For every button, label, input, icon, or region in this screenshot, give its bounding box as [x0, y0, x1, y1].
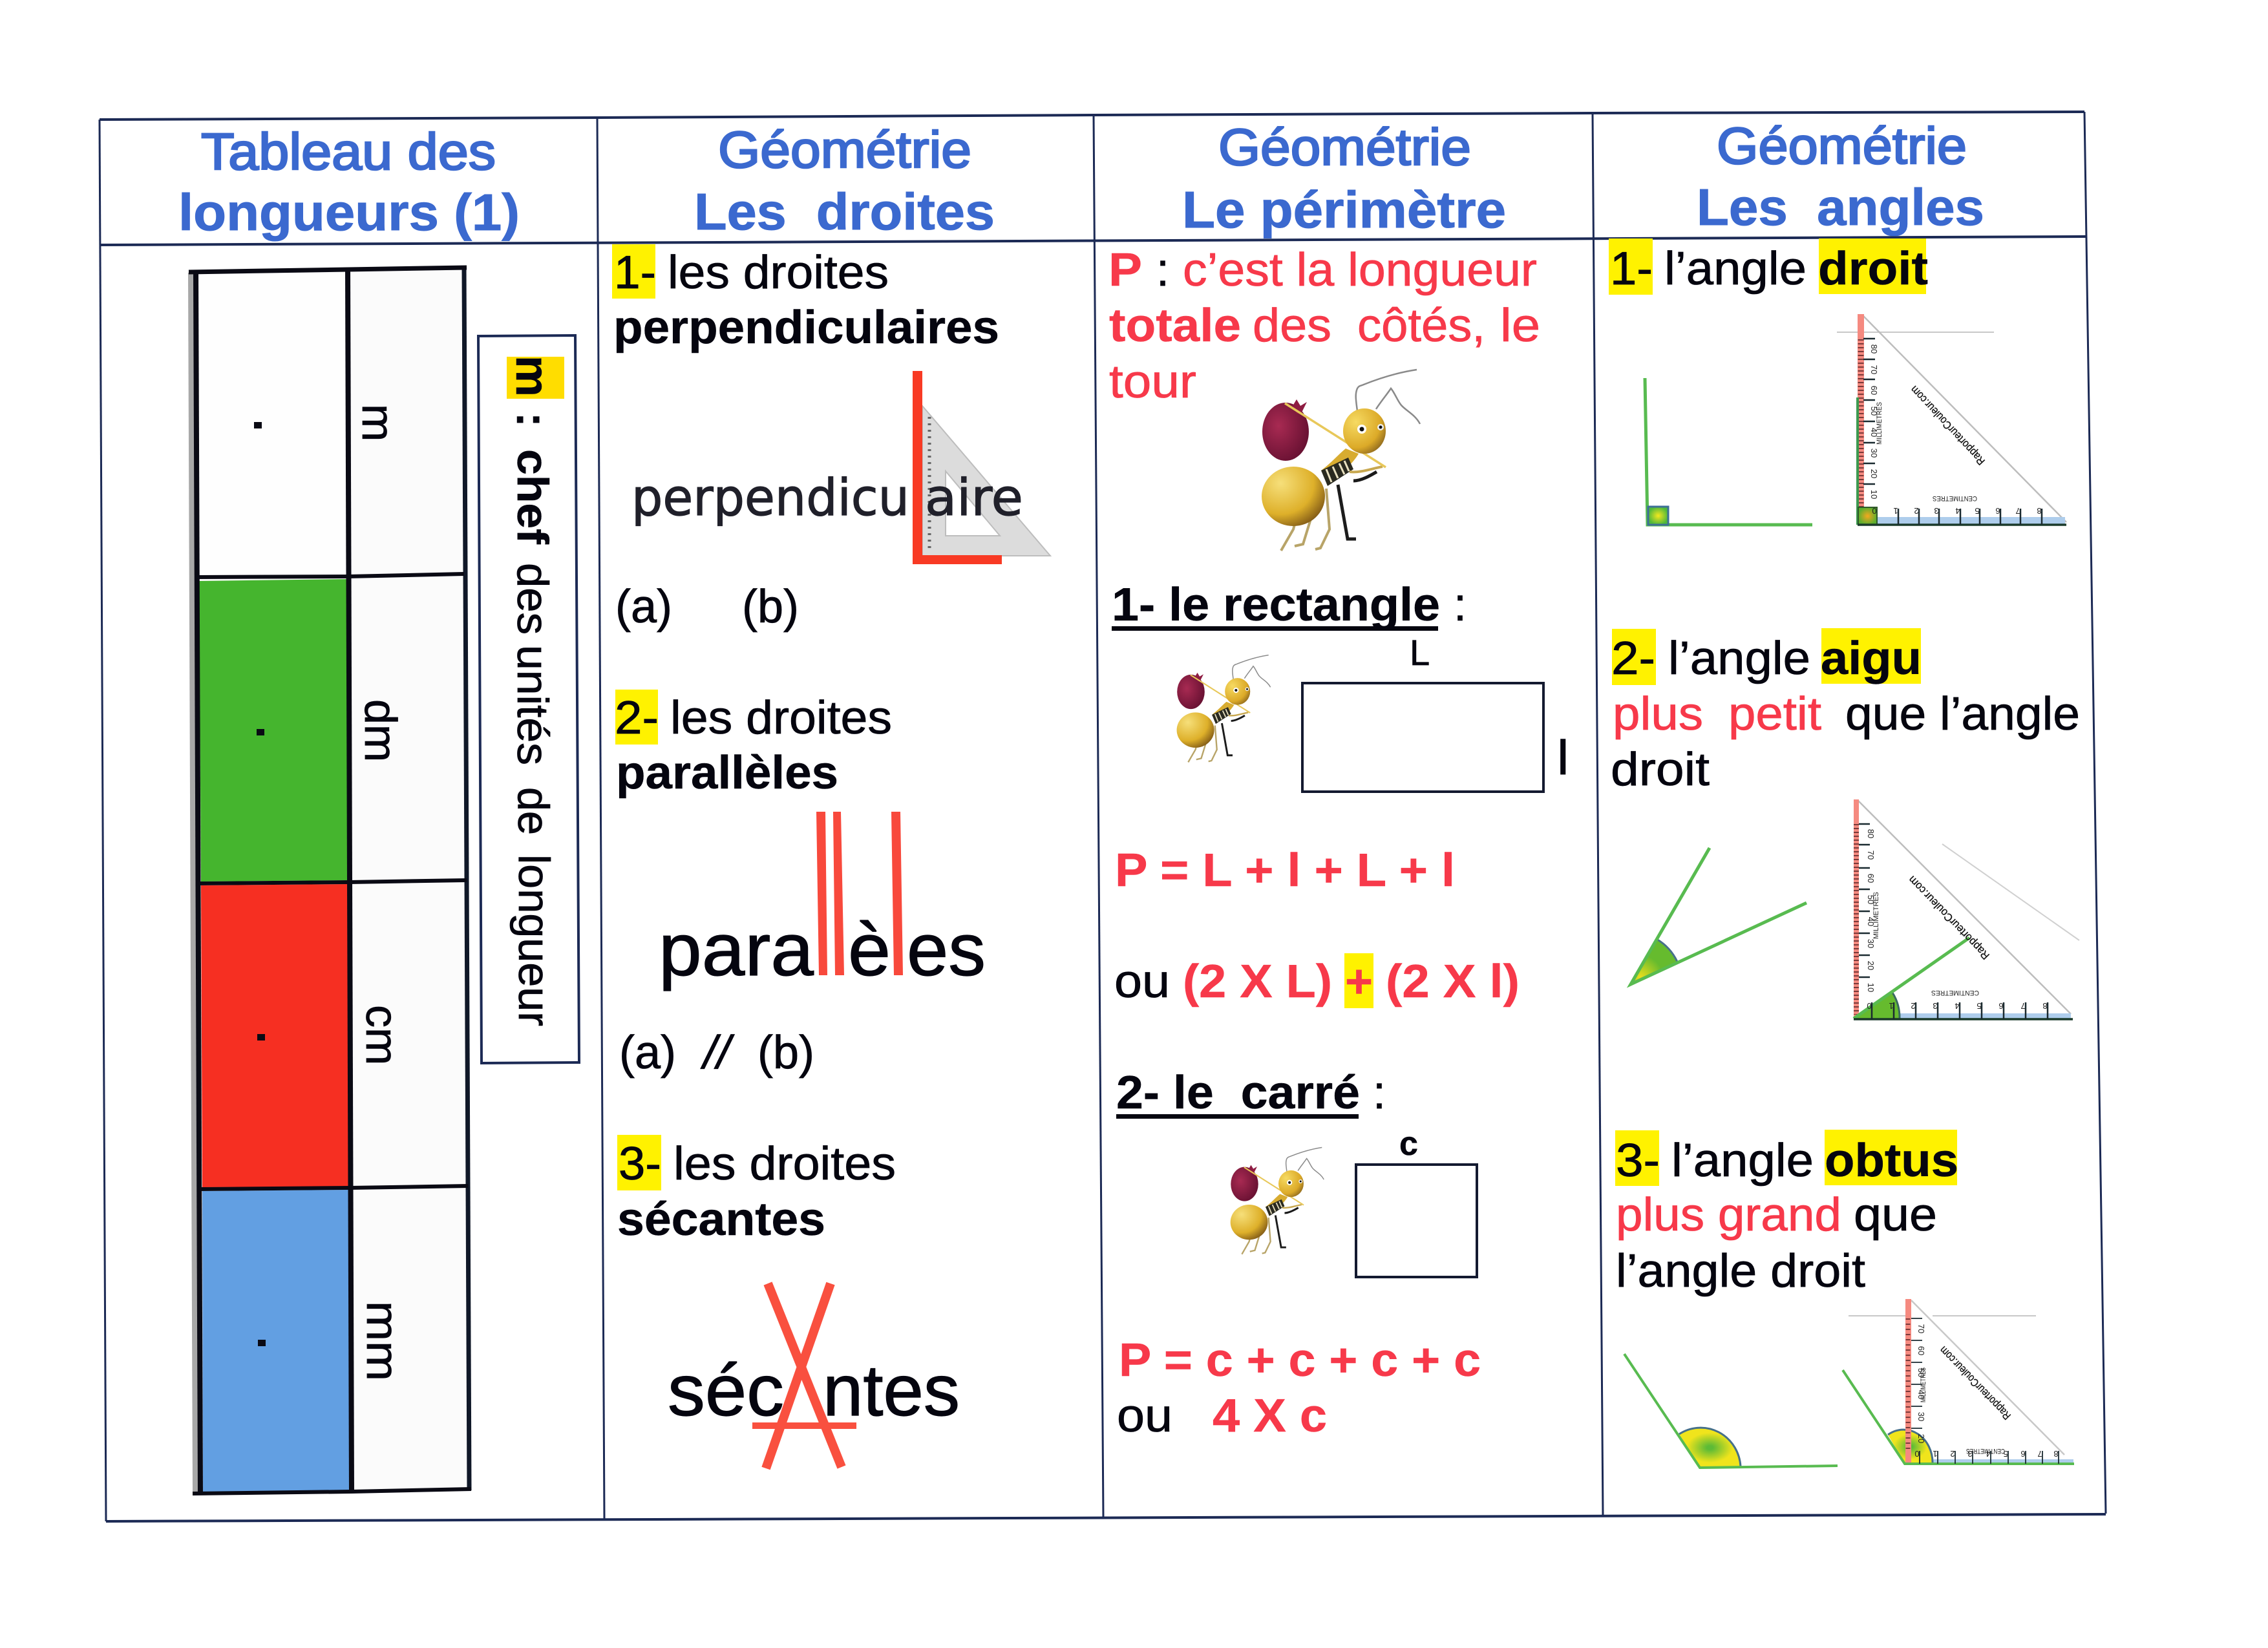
heading: 1- le rectangle: 1- le rectangle: [1112, 579, 1440, 631]
callout: m chef des unites de longueur: unités: [508, 645, 557, 765]
diagram: set square on acute angle: RapporteurCouleur.com: [1906, 873, 1992, 962]
formula: rectangle perimeter: ou: [1114, 956, 1170, 1008]
diagram: set square on right angle: 0: [1872, 506, 1877, 516]
heading: Le périmètre: Le périmètre: [1182, 181, 1506, 238]
callout: m chef des unites de longueur: des: [508, 563, 557, 635]
diagram: set square on acute angle: 70: [1866, 850, 1876, 860]
diagram: set square on acute angle: 30: [1866, 939, 1876, 948]
diagram: set square on right angle: 50: [1869, 407, 1879, 416]
units table: [188, 266, 471, 1494]
item 2: angle aigu: que l’angle: [1845, 688, 2080, 740]
heading: Les droites: Géométrie: [718, 121, 971, 178]
item 3: sécantes: [617, 1135, 896, 1245]
diagram: set square on acute angle: 8: [2042, 1001, 2048, 1011]
item 3: sécantes: les droites: [673, 1138, 896, 1190]
diagram: set square on acute angle: 60: [1866, 874, 1876, 883]
heading: Les angles: [1697, 117, 1984, 236]
decimal point mm: [258, 1340, 266, 1346]
diagram: set square on acute angle: 3: [1933, 1001, 1938, 1011]
diagram: set square on obtuse angle: 40: [1916, 1390, 1926, 1399]
item 2: parallèles: 2-: [615, 692, 659, 744]
decimal point cm: [257, 1034, 265, 1041]
diagram: set square on obtuse angle: 1: [1933, 1449, 1938, 1459]
callout: m chef des unites de longueur: :: [507, 412, 556, 427]
diagram: set square on acute angle: MILLIMETRES: [1872, 892, 1880, 939]
diagram: set square on obtuse angle: 2: [1950, 1449, 1955, 1459]
diagram: set square on obtuse angle: 8: [2053, 1449, 2059, 1459]
diagram: set square on acute angle: 10: [1866, 983, 1876, 992]
callout: m chef des unites de longueur: chef: [508, 449, 557, 544]
rectangle diagram with L and l: l: [1558, 731, 1568, 785]
diagram: set square on obtuse angle: 6: [2020, 1449, 2026, 1459]
cell: cm red: [201, 884, 350, 1187]
diagram: set square on obtuse angle: 70: [1916, 1324, 1926, 1333]
illustration: parallèles: es: [907, 909, 986, 991]
diagram: set square on obtuse angle: 20: [1916, 1434, 1926, 1443]
illustration: parallèles: [659, 812, 986, 991]
diagram: set square on right angle: 6: [1995, 506, 2000, 516]
callout: m chef des unites de longueur: de: [509, 787, 558, 835]
cell: mm blue: [202, 1190, 351, 1492]
diagram: set square on right angle: 8: [2037, 506, 2042, 516]
rectangle diagram with L and l: L: [1410, 632, 1430, 673]
diagram: set square on acute angle: 2: [1911, 1001, 1916, 1011]
labels (a) (b): (b): [742, 581, 799, 633]
item 2: angle aigu: 2-: [1611, 633, 1655, 684]
rectangle diagram with L and l: [1302, 632, 1568, 792]
item 2: parallèles: parallèles: [616, 747, 838, 799]
definition text: P: [1108, 244, 1142, 296]
heading: Les droites: [694, 121, 995, 240]
item 3: angle obtus: plus grand: [1616, 1189, 1841, 1241]
definition text: des: [1253, 300, 1331, 352]
formula: rectangle perimeter: +: [1345, 956, 1373, 1008]
heading: Les angles: Les angles: [1697, 178, 1984, 236]
diagram: set square on obtuse angle: 60: [1916, 1346, 1926, 1355]
illustration: sécantes: ntes: [823, 1350, 960, 1431]
callout: m chef des unites de longueur: m: [506, 355, 558, 397]
illustration: parallèles: è: [848, 909, 891, 991]
panel: Géométrie Les droites: [612, 121, 1050, 1468]
item 2: angle aigu: plus: [1613, 688, 1703, 740]
formula: rectangle perimeter: P = L + l + L + l: [1115, 845, 1455, 896]
diagram: set square on acute angle: 5: [1977, 1001, 1982, 1011]
item 2: parallèles: les droites: [670, 692, 892, 744]
diagram: set square on acute angle: 1: [1889, 1001, 1894, 1011]
diagram: set square on right angle: CENTIMETRES: [1933, 494, 1977, 502]
callout: m chef des unites de longueur: [478, 335, 579, 1063]
diagram: set square on obtuse angle: [1843, 1299, 2074, 1464]
decimal point dm: [257, 729, 264, 735]
panel: Géométrie Le périmètre: [1108, 118, 1568, 1442]
diagram: set square on right angle: 60: [1869, 386, 1879, 395]
heading: 2- le carré: 2- le carré: [1116, 1067, 1360, 1119]
decimal point m: [254, 422, 262, 428]
formula: square perimeter: [1117, 1335, 1481, 1442]
square diagram with c: [1356, 1125, 1477, 1277]
icon: small ant (square): [1231, 1147, 1324, 1254]
diagram: set square on obtuse angle: CENTIMETRES: [1966, 1447, 2005, 1455]
diagram: obtuse angle: [1624, 1354, 1838, 1468]
illustration: sécantes: séc: [668, 1350, 784, 1431]
item 1: angle droit: 1-: [1610, 243, 1653, 295]
item 1: angle droit: droit: [1818, 243, 1928, 295]
heading: Tableau des longueurs: [178, 123, 520, 241]
item 3: angle obtus: l’angle droit: [1616, 1245, 1865, 1297]
formula: square perimeter: 4 X c: [1213, 1390, 1327, 1442]
cell: m: [198, 273, 348, 577]
table grid: [100, 112, 2106, 1521]
diagram: set square on right angle: 7: [2015, 506, 2020, 516]
labels (a) (b): (a): [615, 581, 672, 633]
item 1: perpendiculaires: 1-: [614, 247, 656, 299]
heading: Les angles: Géométrie: [1717, 117, 1967, 174]
diagram: set square on right angle: 1: [1893, 506, 1898, 516]
heading: Les droites: Les droites: [694, 183, 995, 240]
diagram: set square on right angle: 20: [1869, 469, 1879, 478]
formula: rectangle perimeter: (2 X l): [1386, 956, 1520, 1008]
item 2: angle aigu: droit: [1611, 744, 1710, 796]
diagram: set square on right angle: 80: [1869, 344, 1879, 354]
diagram: set square on obtuse angle: 7: [2037, 1449, 2042, 1459]
unit: mm: mm: [357, 1301, 408, 1381]
illustration: perpendiculaire with set square: perpendicu: [631, 469, 909, 527]
icon: small ant (rectangle): [1177, 655, 1271, 762]
heading: 1- le rectangle: :: [1454, 579, 1467, 631]
diagram: set square on right angle: RapporteurCouleur.com: [1908, 383, 1987, 467]
unit: dm: dm: [355, 699, 406, 762]
diagram: set square on right angle: 70: [1869, 365, 1879, 374]
heading: 2- le carré: :: [1373, 1067, 1386, 1119]
illustration: sécantes: [668, 1284, 960, 1468]
item 1: perpendiculaires: [612, 244, 999, 354]
definition text: [1108, 244, 1540, 408]
item 2: angle aigu: aigu: [1821, 633, 1922, 684]
cell: dm green: [199, 579, 349, 882]
formula: square perimeter: ou: [1117, 1390, 1172, 1442]
diagram: set square on right angle: 40: [1869, 428, 1879, 437]
item 3: angle obtus: obtus: [1825, 1135, 1958, 1187]
item 1: perpendiculaires: les droites: [668, 247, 889, 299]
definition text: c’est la longueur: [1183, 244, 1537, 296]
diagram: set square on acute angle: 40: [1866, 917, 1876, 926]
diagram: right angle: [1645, 378, 1812, 525]
item 2: parallèles: [615, 690, 892, 799]
diagram: set square on right angle: 10: [1869, 490, 1879, 499]
labels (a) // (b): (b): [758, 1027, 814, 1079]
diagram: set square on obtuse angle: RapporteurCouleur.com: [1937, 1344, 2013, 1422]
icon: ant with bundle (large): [1262, 370, 1420, 551]
diagram: set square on acute angle: 7: [2020, 1001, 2026, 1011]
diagram: set square on acute angle: 80: [1866, 829, 1876, 838]
item 3: sécantes: sécantes: [617, 1194, 825, 1245]
formula: rectangle perimeter: (2 X L): [1183, 956, 1332, 1008]
item 3: angle obtus: que: [1854, 1189, 1937, 1241]
labels (a) // (b): //: [700, 1027, 735, 1079]
diagram: acute angle: [1631, 848, 1807, 984]
diagram: set square on acute angle: 4: [1955, 1001, 1960, 1011]
diagram: set square on right angle: MILLIMETRES: [1876, 402, 1883, 445]
item 1: angle droit: l’angle: [1664, 243, 1807, 295]
definition text: :: [1156, 244, 1169, 296]
item 2: angle aigu: petit: [1728, 688, 1821, 740]
labels (a) // (b): (a): [619, 1027, 676, 1079]
panel: Géométrie Les angles: [1609, 117, 2080, 1468]
illustration: perpendiculaire with set square: [631, 371, 1050, 564]
diagram: set square on obtuse angle: MILLIMETRES: [1920, 1368, 1927, 1402]
item 1: perpendiculaires: perpendiculaires: [613, 302, 999, 354]
item 3: angle obtus: l’angle: [1671, 1135, 1814, 1187]
diagram: set square on obtuse angle: 50: [1916, 1368, 1926, 1377]
diagram: set square on acute angle: [1854, 799, 2079, 1019]
item 2: angle aigu: l’angle: [1668, 633, 1810, 684]
illustration: perpendiculaire with set square: aire: [925, 469, 1023, 527]
diagram: set square on acute angle: 0: [1867, 1001, 1872, 1011]
diagram: set square on acute angle: 50: [1866, 895, 1876, 904]
diagram: set square on right angle: 4: [1955, 506, 1960, 516]
diagram: set square on acute angle: 20: [1866, 961, 1876, 970]
heading: Le périmètre: Géométrie: [1218, 118, 1471, 176]
item 3: angle obtus: [1615, 1130, 1958, 1297]
definition text: totale: [1109, 300, 1241, 352]
diagram: set square on acute angle: 6: [1998, 1001, 2004, 1011]
formula: rectangle perimeter: [1114, 845, 1520, 1008]
callout: m chef des unites de longueur: longueur: [509, 854, 558, 1026]
definition text: côtés,: [1357, 300, 1485, 352]
diagram: set square on obtuse angle: 3: [1967, 1449, 1973, 1459]
definition text: tour: [1109, 356, 1196, 408]
diagram: set square on obtuse angle: 5: [2003, 1449, 2008, 1459]
item 3: angle obtus: 3-: [1616, 1135, 1660, 1187]
square diagram with c: c: [1399, 1125, 1418, 1163]
diagram: set square on right angle: 5: [1975, 506, 1980, 516]
heading: Tableau des longueurs: longueurs (1): [178, 184, 520, 241]
diagram: set square on right angle: [1837, 314, 2066, 525]
unit: m: m: [353, 404, 403, 441]
panel: Tableau des longueurs: [178, 123, 579, 1494]
diagram: set square on obtuse angle: 0: [1914, 1449, 1920, 1459]
diagram: set square on right angle: 3: [1934, 506, 1939, 516]
item 2: angle aigu: [1611, 628, 2080, 796]
item 1: angle droit: [1609, 238, 1928, 295]
diagram: set square on right angle: 30: [1869, 449, 1879, 458]
diagram: set square on right angle: 2: [1914, 506, 1919, 516]
definition text: le: [1500, 300, 1540, 352]
unit: cm: cm: [357, 1005, 407, 1065]
diagram: set square on acute angle: CENTIMETRES: [1931, 989, 1979, 997]
heading: Le périmètre: [1182, 118, 1506, 238]
diagram: set square on obtuse angle: 4: [1986, 1449, 1991, 1459]
illustration: parallèles: para: [659, 909, 814, 991]
diagram: set square on obtuse angle: 30: [1916, 1412, 1926, 1421]
item 3: sécantes: 3-: [619, 1138, 661, 1190]
labels (a) (b): [615, 581, 799, 633]
heading: Tableau des longueurs: Tableau des: [201, 123, 496, 180]
formula: square perimeter: P = c + c + c + c: [1119, 1335, 1481, 1386]
labels (a) // (b): [619, 1027, 814, 1079]
